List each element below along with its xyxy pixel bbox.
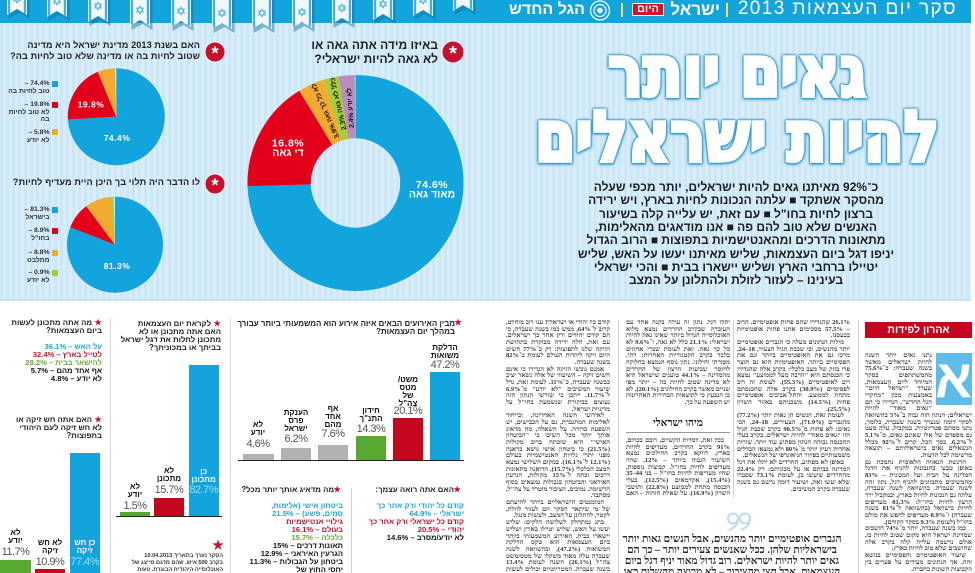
bar: torch lighting — [430, 372, 460, 460]
list: worries answers: תאונות דרכים – 15% — [273, 541, 343, 550]
label: no bond: זיקה — [42, 546, 58, 555]
label: unknown — [8, 528, 23, 545]
label: prize: פרס — [288, 416, 304, 425]
divider: article left — [618, 320, 619, 573]
question: bond to diaspora — [16, 415, 102, 440]
heading: donut question: באיזו מידה אתה גאה או — [311, 38, 438, 52]
value: torch: 47.2% — [431, 359, 459, 371]
legend text: unknown: לא יודע — [27, 136, 50, 144]
label: yes bond: זיקה — [77, 546, 93, 555]
panel: plans text and chart column — [0, 318, 102, 573]
legend text: not good — [8, 101, 50, 123]
label: yes bond — [74, 538, 95, 555]
label: none: מהם — [324, 420, 341, 429]
legend text: undecided: 8.8% – — [28, 249, 50, 256]
bar: yes feels bond — [70, 453, 100, 573]
panel: worries — [235, 483, 347, 573]
list: worries answers: בעולם – 16.1% — [292, 525, 343, 534]
label: flyover: מטס — [400, 383, 416, 392]
list: worries answers: ביטחון על הגבולות – 11.3% — [249, 557, 343, 566]
divider: first — [110, 318, 111, 573]
panel: light blue hero background — [0, 23, 971, 301]
question: flag: מתכונן לתלות את דגל ישראל — [121, 335, 221, 344]
badge: star pie one — [204, 42, 226, 63]
heading: pie two question: לו הדבר היה תלוי בך היכן היית מעדיף לחיות? — [13, 177, 200, 187]
legend text: Israel: 81.3% – — [25, 206, 50, 213]
label: planning: כן — [200, 467, 207, 476]
article column: left: קודם כל יהודי או ישראלי? ענו רוב מוחלט, קרוב ל־64%, ממש כמו בשנה שעברה, כי הם קודם יהודים ורק אחר כך ישראלים. עם זאת, חלה ירידה מבוקרת בתחושת הזיקה שלנו לתפוצות: רק כ־77% חשים היום זיקה ליהדות העולם לעומת כ־82% בשנה שעברה. — [506, 320, 610, 366]
donut chart: pride — [248, 75, 464, 291]
decoration: hanging flags garland — [7, 0, 476, 33]
bar: unknown — [120, 512, 150, 516]
value: yes bond: 77.4% — [70, 556, 99, 568]
intro paragraph: יטיילו ברחבי הארץ ושליש יישארו בבית ■ והכי ישראלי — [594, 260, 878, 274]
main title — [535, 36, 940, 172]
badge: star pie two — [204, 174, 226, 195]
legend key: blue — [52, 81, 58, 87]
pie chart: good to live — [68, 68, 165, 166]
label: yes bond: כן חש — [74, 538, 95, 547]
article column: middle top: יתלו דגל. נתון זה עולה בקנה אחד עם העובדה שבקרב החרדים נמצא מלוא האוכלוסייה הגדול ביותר שאינו גאה להיות ישראלי: 21.1% כלל לא גאה, ו־9.6% לא כל כך גאה. זאת לעומת שברי אחוזים בלבד בקרב הקטגוריות האחרות: דתי, מסורתי וחילוני. נתון נוסף הנמצא בחלוקה לחוסר שביעות הרצון של החרדים מהמדינה – 44.1% טוענים שישראל היא לא מדינה שטוב לחיות בה – יותר מפי שניים מאשר בקרב החילונים (20.1%). לא כן הנבעץ כי לתוצאות הבחירות האחרונות יש השפעה על כך. — [626, 320, 730, 406]
list: identity answers — [369, 502, 464, 542]
pull quote — [600, 535, 864, 573]
donut chart: pride: לא כל כך גאה 3.9% — [310, 82, 341, 139]
divider: second — [230, 318, 231, 573]
panel: self-identity — [355, 483, 467, 545]
publisher logo: red tag: היום — [637, 3, 659, 15]
legend text: unknown: לא יודע — [27, 276, 50, 284]
list: plans answers: לטייל בארץ – 32.4% — [33, 350, 102, 359]
label: planning: מתכונן — [192, 475, 216, 484]
label: flyover: משט/ — [398, 374, 418, 384]
donut chart: pride: 74.6% — [416, 179, 448, 191]
list: identity answers: לא יודע/מסרב – 14.6% — [387, 533, 464, 542]
legend key: green — [52, 270, 58, 276]
label: torch: הדלקת — [432, 343, 458, 352]
question: events: מבין האירועים הבאים איזה אירוע הוא המשמעותי ביותר עבורך — [237, 318, 455, 328]
label: unknown: יודע — [251, 428, 265, 437]
question: plans on independence day: ביום העצמאות? — [46, 326, 102, 335]
divider: article right — [858, 320, 859, 573]
bar: none — [318, 445, 348, 460]
article column: right with drop cap — [865, 353, 972, 573]
question: events: במהלך יום העצמאות? — [376, 327, 455, 336]
badge: star donut question — [442, 40, 464, 64]
question: bond to diaspora: לא חש זיקה לעם היהודי — [19, 423, 102, 432]
intro paragraph: בעינינו – לעזור לזולת ולהתלונן על המצב — [629, 273, 843, 287]
question: plans on independence day: ★ מה אתה מתכונן לעשות — [11, 318, 102, 326]
byline: Aharon Lapidot: אהרון לפידות — [887, 324, 950, 336]
legend text: unknown: 0.9% – — [28, 269, 50, 276]
question: flag: בביתך או במכוניתך? — [149, 343, 221, 352]
label: unknown: יודע — [8, 536, 23, 545]
article column: right with drop cap: שיעור האופטימיים והפסימיים בנושא זהה, אך הנתונים מעידים על פערים בין הקבוצות השונות בחברה. — [865, 552, 972, 572]
article column: right with drop cap: הרגשת הגאווה הלאומית נתמכת גם באופן טבעי בהנכונות להניף את הדגל המדינה על הבית ועל המכונית – 83% מהמשיבים מתכוונים להניף דגל, נתון זהה לשנה שעברה. בהשוואה לשנה שעברה, עלתה גם הנכונות לחיות בארץ, ובמקביל ירד הרצון לחיות בחו"ל: 81.3% מעדיפים לחיות בישראל (בהשוואה ל־81% בשנה שעברה) ו־8.9% מעדיפים לחפש את מזלם בחו"ל (לעומת 9.3% בסקר הקודם). — [865, 459, 972, 526]
legend key: red — [52, 102, 58, 108]
legend text: abroad: 8.9% – — [28, 227, 50, 234]
chart baseline — [238, 460, 464, 461]
bar: bible quiz — [356, 436, 386, 460]
question: plans on independence day — [11, 318, 102, 335]
donut chart: pride: כלל לא גאה 2.3% — [329, 77, 348, 131]
bar: IDF flyover — [393, 418, 423, 460]
legend key: orange — [52, 129, 58, 135]
divider: worries — [350, 488, 352, 573]
value: unknown: 1.5% — [123, 500, 147, 512]
label: flyover: צה"ל — [399, 399, 417, 408]
heading: pie one question: האם בשנת 2013 מדינת ישראל היא מדינה — [27, 40, 200, 50]
value: none: 7.6% — [321, 428, 345, 440]
intro paragraph: ברצון לחיות בחו"ל ■ עם זאת, יש עלייה קלה בשיעור — [599, 207, 873, 221]
intro paragraph: יניפו דגל ביום העצמאות, שליש מאיתנו יעשו על האש, שליש — [578, 247, 894, 261]
list: identity answers: יהודי – 20.5% — [418, 525, 464, 534]
icon: method star: ★ — [212, 538, 224, 552]
value: planning: 82.7% — [189, 484, 218, 496]
legend key: red — [52, 228, 58, 234]
question: bond to diaspora: ★ האם אתה חש זיקה או — [16, 415, 102, 424]
pull quote: גאים יותר להיות ישראלים. רוב גדול מאוד יניף דגל ביום — [625, 556, 839, 567]
heading: donut question — [311, 38, 438, 66]
pie chart: where to live: 81.3% — [104, 261, 130, 271]
label: none — [324, 404, 341, 429]
donut chart: pride: די גאה — [272, 147, 304, 159]
byline: Aharon Lapidot — [865, 322, 972, 338]
article column: third — [737, 320, 850, 498]
heading: pie one question: שטוב לחיות בה או מדינה שלא טוב לחיות בה? — [10, 51, 200, 61]
label: no bond — [38, 538, 62, 555]
value: prize: 6.2% — [284, 433, 308, 445]
list: worries answers: גילויי אנטישמיות — [286, 517, 343, 526]
list: plans answers: על האש – 36.1% — [45, 342, 102, 351]
label: unknown — [128, 482, 142, 499]
label: quiz: התנ"ך — [360, 414, 382, 423]
bar: Israel Prize — [281, 448, 311, 460]
value: no bond: 10.9% — [36, 556, 64, 568]
list: plans answers: לא יודע – 4.8% — [51, 374, 102, 383]
list: plans answers — [25, 342, 102, 383]
label: quiz — [360, 406, 382, 423]
label: planning — [192, 467, 216, 484]
label: torch — [431, 343, 459, 360]
article column: left: המומנטים הישראליים ביותר להיעתם של מי שיתאר הסקר הם לעזור לזולת, לקטר, להתלונן על המצב, ולעשות מנגל. — [506, 499, 610, 519]
question: events — [237, 318, 462, 336]
list: worries answers: סמים, פשע) – 21.5% — [272, 509, 343, 518]
pull quote: הגברים אופטימיים יותר מהנשים, אבל הנשים גאות יותר — [623, 534, 841, 545]
legend text: good: 74.4% – — [25, 80, 50, 87]
value: quiz: 14.3% — [357, 423, 385, 435]
legend text: undecided: מתלבט — [27, 256, 50, 264]
bar: not planning — [154, 498, 184, 516]
label: unknown: לא — [10, 528, 21, 537]
intro paragraph: מהסקר אשתקד ■ עלתה הנכונות לחיות בארץ, ויש ירידה — [588, 193, 884, 207]
value: unknown: 11.7% — [2, 546, 29, 558]
intro paragraph: מתאונות הדרכים ומהאנטישמיות בתפוצות ■ הרוב הגדול — [587, 233, 885, 247]
label: prize: ישראל — [284, 424, 308, 433]
legend text: unknown — [27, 269, 50, 284]
label: unknown: יודע — [128, 490, 142, 499]
survey method note: בקרב 500 איש, שהם מדגם מייצג של — [132, 560, 223, 566]
label: unknown — [238, 421, 278, 437]
survey method note: האוכלוסייה היהודית הבוגרת. טעות — [137, 567, 223, 573]
donut chart: pride: 16.8% — [272, 138, 304, 150]
list: identity answers: קודם כל ישראלי ורק אחר כך — [369, 517, 464, 526]
survey method note — [132, 553, 223, 573]
publisher logo: New Wave: הגל החדש — [509, 1, 585, 18]
label: torch: משואות — [431, 351, 459, 360]
question: identity: האם אתה רואה עצמך: — [375, 485, 454, 494]
list: worries answers — [249, 502, 343, 573]
bar: yes planning — [189, 365, 219, 516]
list: worries answers: כלכלה – 15.7% — [291, 533, 343, 542]
label: not planning: מתכונן — [157, 474, 181, 483]
label: none: אחד — [325, 412, 341, 421]
badge: star pie two: * — [211, 176, 219, 195]
value: flyover: 20.1% — [394, 405, 422, 417]
legend text: not good: בה — [41, 116, 50, 123]
publisher logo: red tag — [632, 3, 664, 16]
article column: left — [506, 320, 610, 573]
label: not planning — [157, 466, 181, 483]
article column: right with drop cap: כמו בשנה שעברה, יותר מ־74% חושבים שמדינת ישראל היא מקום שטוב לחיות בו, אולם נרשמה עלייה קלה בקרב אלה שחושבים שלא טוב לחיות בארץ. — [865, 525, 972, 552]
question: flag — [121, 318, 221, 352]
label: flyover: של — [402, 391, 414, 400]
icon: quote marks — [726, 512, 752, 532]
pie chart: good to live: 19.8% — [78, 100, 104, 110]
intro paragraph: האנשים שלא טוב להם פה ■ אנו מודאגים מהאלימות, — [595, 220, 877, 234]
legend: pie one — [8, 80, 58, 144]
bar: no bond — [35, 569, 65, 573]
label: prize — [276, 409, 316, 434]
legend: pie two — [24, 206, 58, 284]
legend text: not good: 19.8% – — [25, 101, 50, 108]
pie chart: good to live: 74.4% — [104, 133, 130, 143]
list: worries answers: הגרעין האיראני – 12.9% — [261, 549, 343, 558]
legend text: Israel: בישראל — [25, 214, 50, 220]
legend text: unknown — [27, 129, 50, 144]
heading: pie one question — [10, 40, 200, 61]
donut chart: pride: לא יודע 2.4% — [345, 88, 356, 128]
rule: under subheading — [626, 432, 730, 433]
list: identity answers: קודם כל יהודי ורק אחר כך — [377, 501, 464, 510]
divider: yellow second — [621, 3, 623, 17]
legend text: abroad — [28, 227, 50, 242]
chart baseline — [116, 516, 222, 517]
label: no bond: לא חש — [38, 538, 62, 547]
donut chart: pride: מאוד גאה — [409, 188, 455, 200]
publisher logo: Israel Hayom: ישראל — [670, 0, 720, 19]
label: prize: הענקת — [284, 408, 308, 417]
legend text: good: טוב לחיות בה — [8, 88, 50, 94]
legend text: abroad: בחו"ל — [31, 234, 50, 242]
header band — [0, 0, 971, 23]
panel: self-identity: ★ — [453, 484, 461, 494]
label: unknown: לא — [253, 420, 263, 429]
label: unknown: לא — [130, 482, 140, 491]
badge: star pie one: * — [211, 44, 219, 63]
question: bond to diaspora: בתפוצות? — [67, 431, 102, 440]
label: quiz: חידון — [362, 406, 380, 415]
legend text: good — [8, 80, 50, 94]
legend text: Israel — [24, 206, 50, 220]
list: worries answers: ביטחון אישי (אלימות, — [271, 501, 343, 510]
legend text: not good: לא טוב לחיות — [9, 108, 50, 116]
survey method note: הסקר נערך בתאריך 10.04.2013 — [144, 553, 223, 559]
list: identity answers: ישראלי – 64.9% — [410, 509, 464, 518]
divider: yellow — [726, 3, 728, 17]
label: flyover — [398, 374, 418, 408]
article column: third: מילות הנתונים מעלה כי הגברים אופטימיים יותר מהנשים, וכי שכבת הגיל הצעיר, 18–24, מרכז גם את האופטימיים ביותר וגם את הפסימיים ביותר. האופטימיות היא גם תוצר פרי בוזק של מצב כלכלי: בקרב אלה שהגדירו כי הכנסתם היא "הרבה מעל לממוצע" נמצא רוב לאופטימיים (55.3%). לעומת זה רוב לפסימיים (30.9%) בקרב אלה שהכנסתם מתחת לממוצע. והתל־אביבים אופטימיים פחות (14.5%) משכניהם באזור השרון (25.5%). — [737, 339, 850, 413]
subheading: who is Israeli: מיהו ישראלי — [653, 418, 703, 429]
panel: events bar chart — [237, 318, 464, 461]
bar: unknown — [0, 560, 31, 573]
value: unknown: 4.6% — [246, 438, 270, 450]
panel: flag chart column — [116, 318, 224, 573]
divider: article middle — [733, 320, 734, 498]
intro paragraph: כ־92% מאיתנו גאים להיות ישראלים, יותר מכפי שעלה — [594, 180, 878, 194]
legend key: blue — [52, 207, 58, 213]
article column: left: לאירועי השנה האחרונה, ובייחוד לאלימות המתגברת, גם על הכבישים, יש השפעה ברורה. על השאלה, מה מדאיג אותך יותר מכל השיבו כי "הביטחון האישי" היא שזכתה ברוב מקולות (21.5%) כי ביטחון אישי נושא בראנה מפני יתרי גלויות האנטישמיות בעולם (12.1% ל־16.1%). במקום השלישי נמצא המצב הכלכלי (15.7%), הדואגה מתאונות דרכים זכתה ל־15% מקולות, הגרעין האיראני והביטחון בגבולות נמצאים בסוף הרשימה. נמוכים, הציבור מוטרד על צה"ל, מסתבר. — [506, 412, 610, 499]
article column: right with drop cap: נתנו גאים יותר השנה להיות ישראלים מאשר בשנה שעברה: כ־75.6% מהמשתתפים בסקר המיוחד ליום העצמאות, שערך "ישראל היום" באמצעות מכון "מחקרי הגל החדש", הגדירו כי הם "גאים מאוד" להיות ישראלים; הנתון הזה גבוה ב־5% בהשוואה לסקר דומה שנערך בשנה שעברה, כלומר, נתנו מסתם פטריוטיות. במקביל, עלה מעט גם מספרם של אלו שאינם גאים, מ־5.1% ל־6.2%. בסך הכל, קרוב ל־92% מכלל הנשאלים גאים בישראליותם – תוצאה מרשימה לכל הדעות. — [865, 353, 972, 459]
list: plans answers: להישאר בבית – 28.2% — [25, 358, 102, 367]
pull quote: בישראליות שלהן. ככל שאנשים צעירים יותר – כך הם — [627, 545, 837, 556]
legend text: undecided — [27, 249, 50, 264]
article column: left: אמנם גובשו הזיקה לא הגדירו כי אינם חשים זיקה – השיעור של אלה נשאר יציב כבשנה שעברה, כ־11%. לעומת זאת, גדל שיעור המשיבים "לא יודע" מ־6.9% ל־11.7%. ייתכן כי שורשי הנתון הזה נעוצים בביקורת שנשמעת בחו"ל על מדיניות ישראל. — [506, 366, 610, 413]
question: flag: האם אתה מתכונן או לא — [139, 327, 221, 336]
intro paragraph — [578, 180, 894, 287]
bar: unknown — [243, 454, 274, 460]
heading: donut question: לא גאה להיות ישראלי? — [314, 52, 438, 66]
article column: third: לעומת זאת, הנשים הן גאות יותר (77.2%) מהגברים (71.9%), הצעירים, 18–24, הכי גאים: לא פחות מ־90.5% בקרב שכבת הגיל הזו "גאים מאוד" להיות ישראלים, בקרב בעלי ההכנסה גבוהה הנתון מפתיע עוד יותר, שורות אחדות רעיון יותר מ־80% ולא נמצאו הבדלים משמעותיים בפיזור הגיאוגרפי של הנשאלים. — [737, 412, 850, 459]
value: not planning: 15.7% — [155, 484, 183, 496]
legend key: orange — [52, 250, 58, 256]
label: none: אף — [328, 404, 338, 412]
label: not planning: לא — [164, 466, 174, 475]
list: plans answers: אף אחד מהם – 5.7% — [31, 366, 102, 375]
article column: third: באופן לא מפתיע, החרדים לא יתלו את דגל המדינה בביתם או על מכוניתם: רק 22.4% מהחרדים שיעשו כן, לעומת 73.1% שסברו שלא יעשו זאת, ושיעור דומה נרשם גם בשנה שעברה בקרב המשיבים. — [737, 459, 850, 493]
panel: worries: ★ — [333, 484, 341, 494]
question: worries: מה מדאיג אותך יותר מכל? — [241, 485, 334, 494]
pie chart: where to live — [67, 196, 163, 293]
question: flag: ★ לקראת יום העצמאות — [138, 318, 221, 328]
legend text: unknown: 5.8% – — [28, 129, 50, 136]
icon: New Wave logo — [590, 0, 610, 21]
panel: events bar chart: ★ — [454, 318, 462, 327]
